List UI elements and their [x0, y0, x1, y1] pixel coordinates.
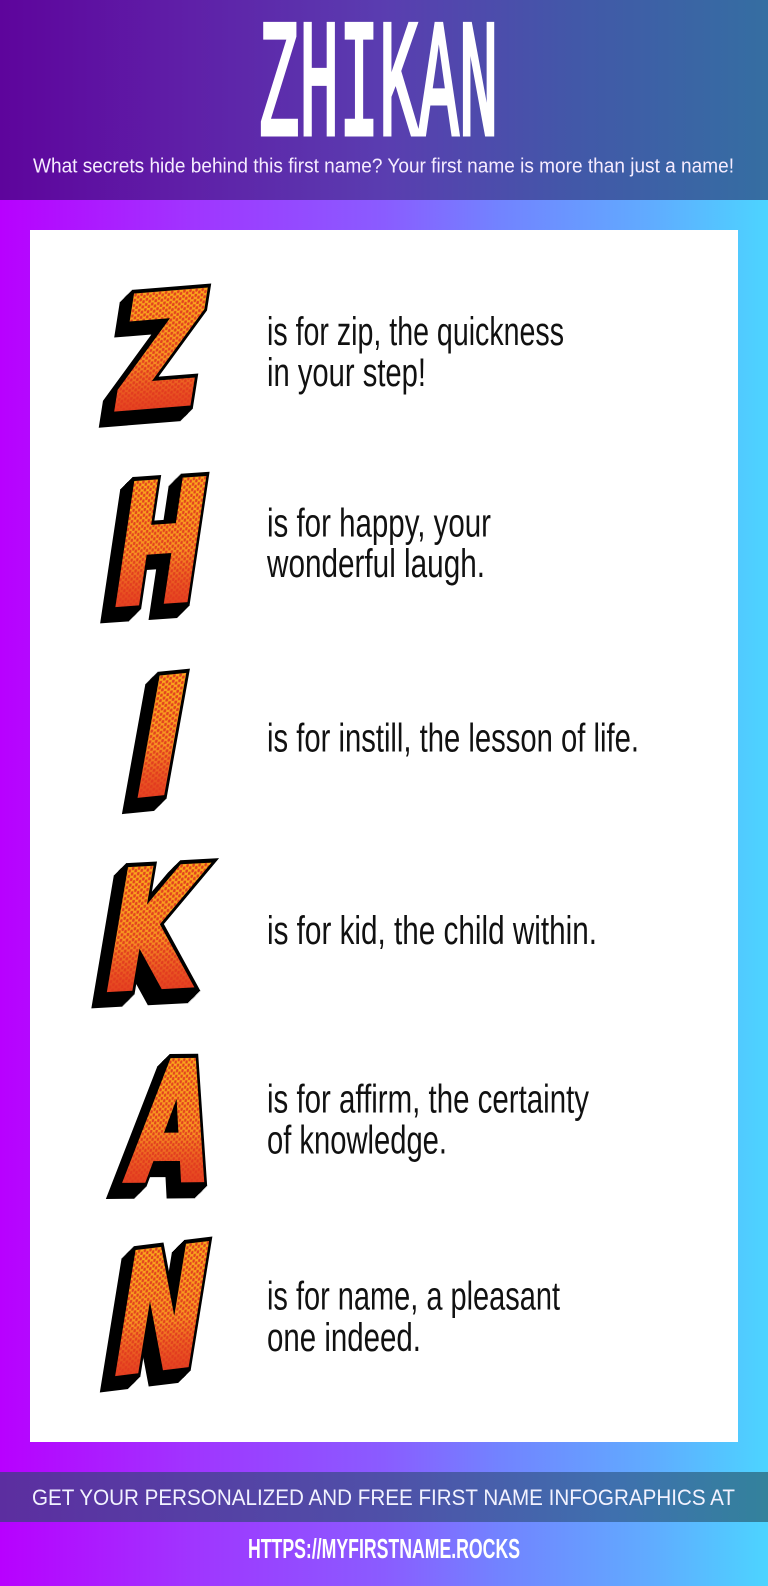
text: H meaning: is for happy, your: [267, 502, 491, 546]
icon: comic letter K: K: [93, 835, 215, 1028]
white content panel: [30, 230, 738, 1442]
footer call to action: GET YOUR PERSONALIZED AND FREE FIRST NAME INFOGRAPHICS AT: [32, 1485, 735, 1510]
letter A row: [119, 1030, 589, 1219]
letter H row: [103, 446, 491, 643]
icon: comic letter N: N: [102, 1210, 222, 1412]
text: A meaning: is for affirm, the certainty: [267, 1078, 589, 1122]
footer url: HTTPS://MYFIRSTNAME.ROCKS: [248, 1533, 520, 1564]
icon: comic letter H: H: [103, 446, 218, 643]
text: A meaning: of knowledge.: [267, 1118, 447, 1162]
subtitle: What secrets hide behind this first name? Your first name is more than just a name!: [33, 156, 734, 178]
text: K meaning: is for kid, the child within.: [267, 909, 597, 953]
text: N meaning: is for name, a pleasant: [267, 1274, 560, 1318]
text: H meaning: wonderful laugh.: [266, 542, 485, 586]
header band: [0, 0, 768, 200]
text: Z meaning: [267, 310, 564, 395]
footer band: [0, 1472, 768, 1522]
icon: comic letter H: H: [103, 446, 218, 643]
icon: comic letter A: A: [119, 1030, 226, 1219]
text: A meaning: [267, 1078, 589, 1162]
icon: comic letter K: K: [93, 835, 215, 1028]
text: N meaning: one indeed.: [267, 1316, 421, 1360]
icon: comic letter Z: Z: [106, 261, 216, 446]
title: ZHIKAN: [260, 0, 498, 184]
icon: comic letter N: N: [102, 1210, 222, 1412]
text: I meaning: is for instill, the lesson of life.: [267, 717, 639, 761]
letter I row: [123, 645, 639, 834]
text: N meaning: [267, 1274, 560, 1360]
letter Z row: [106, 261, 564, 446]
text: Z meaning: is for zip, the quickness: [267, 310, 564, 354]
letter N row: [102, 1210, 560, 1412]
text: H meaning: [266, 502, 491, 586]
icon: comic letter Z: Z: [106, 261, 216, 446]
icon: comic letter I: I: [123, 645, 200, 834]
icon: comic letter I: I: [123, 645, 200, 834]
icon: comic letter A: A: [119, 1030, 226, 1219]
text: Z meaning: in your step!: [267, 351, 426, 395]
letter K row: [93, 835, 597, 1028]
